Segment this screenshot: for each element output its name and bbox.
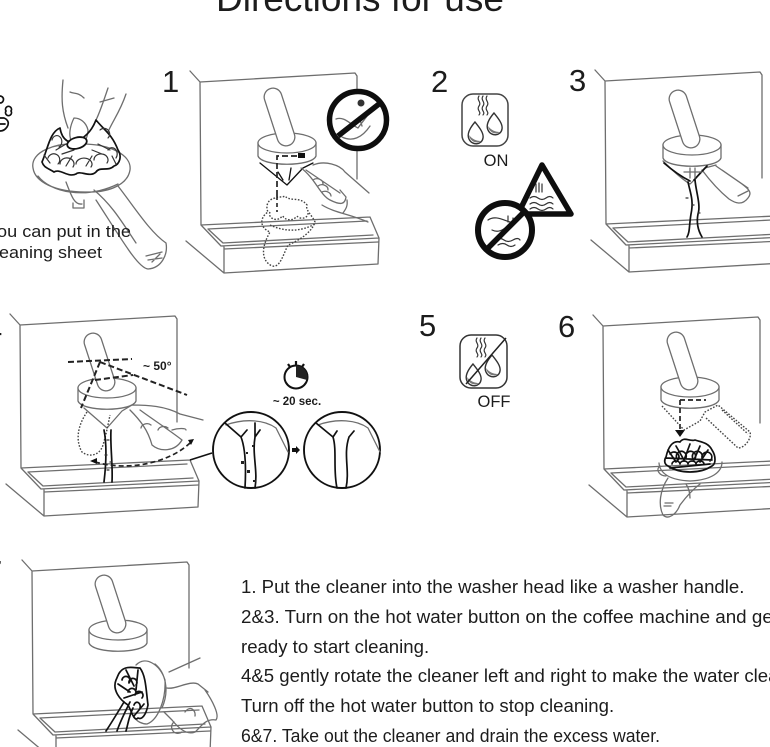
panel: step 6 xyxy=(589,315,770,517)
instructions text block: ready to start cleaning. xyxy=(241,636,429,657)
panel: step 1 xyxy=(186,71,386,273)
icon: timer xyxy=(284,361,308,388)
water stream xyxy=(104,430,112,482)
step number 1: 1 xyxy=(162,64,179,99)
step number 2: 2 xyxy=(431,64,448,99)
step number 5: 5 xyxy=(419,308,436,343)
panel: step 4 xyxy=(6,314,203,516)
filter holder being inserted xyxy=(260,163,313,185)
handle and basket xyxy=(663,161,750,203)
label: about 50 degrees: ~ 50° xyxy=(143,359,172,373)
angle dashed guides xyxy=(68,359,187,408)
instructions text block xyxy=(241,576,770,746)
panel: cleaning sheet insertion xyxy=(0,80,166,269)
panel: step 7 xyxy=(18,560,217,747)
label: 20 seconds: ~ 20 sec. xyxy=(273,396,321,408)
caption: cleaning sheet: ou can put in the xyxy=(0,222,131,241)
step number 3: 3 xyxy=(569,63,586,98)
icon: no hand prohibition sign xyxy=(330,92,386,148)
swivel arrow xyxy=(95,443,190,466)
filter basket with flowers xyxy=(658,462,722,517)
label: on: ON xyxy=(484,152,508,170)
illustration: filter basket with flowers and fingers xyxy=(33,80,166,269)
icon: hot water off button xyxy=(460,335,507,388)
instructions text block: 6&7. Take out the cleaner and drain the excess water. xyxy=(241,725,660,746)
instructions text block: Turn off the hot water button to stop cleaning. xyxy=(241,695,614,716)
water xyxy=(106,702,133,731)
connector xyxy=(190,453,212,460)
basket held in hand xyxy=(134,658,217,733)
detail: cloudy water xyxy=(213,412,289,488)
icon: cleaning tablets xyxy=(0,96,12,131)
step number 6: 6 xyxy=(558,309,575,344)
panel: step 3 xyxy=(591,70,770,272)
hand xyxy=(301,163,369,222)
detail: clear water xyxy=(304,412,380,488)
instructions text block: 2&3. Turn on the hot water button on the coffee machine and get xyxy=(241,606,770,627)
label: off: OFF xyxy=(478,393,510,411)
dotted ghost of basket xyxy=(262,196,315,266)
icon: hot water on button xyxy=(462,94,508,146)
text: eaning sheet xyxy=(0,243,102,262)
icon: hot water warning triangle and prohibition xyxy=(478,165,571,257)
dotted ghost xyxy=(78,412,110,455)
hand and handle xyxy=(84,405,203,450)
instructions text block: 1. Put the cleaner into the washer head like a washer handle. xyxy=(241,576,744,597)
dashed guide and ghost funnel xyxy=(680,400,706,430)
arrow between details xyxy=(292,446,300,454)
